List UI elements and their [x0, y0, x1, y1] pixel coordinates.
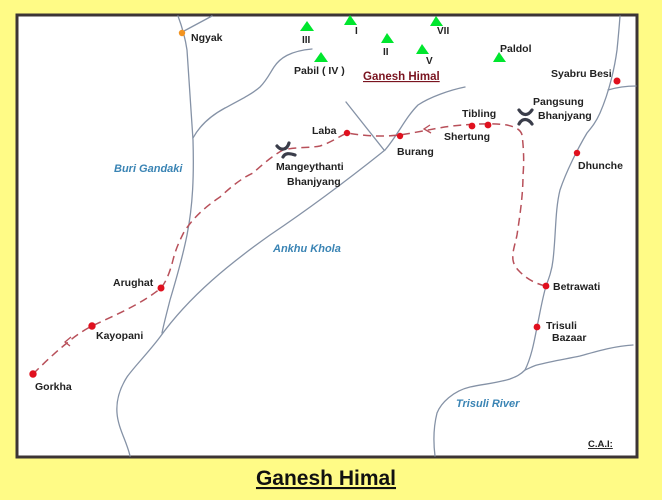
trek route	[33, 124, 546, 374]
arrow: route direction near Shertung	[424, 125, 431, 133]
rivers	[117, 16, 636, 456]
town labels: Shertung	[444, 131, 490, 143]
town markers	[29, 78, 621, 378]
town labels: Mangeythanti	[276, 161, 344, 173]
town labels: Pangsung	[533, 96, 584, 108]
town labels: Syabru Besi	[551, 68, 612, 80]
peaks	[300, 15, 506, 62]
town labels: Burang	[397, 146, 434, 158]
town labels: Tibling	[462, 108, 496, 120]
town labels: Kayopani	[96, 330, 143, 342]
river labels	[114, 163, 520, 410]
peak labels: V	[426, 56, 433, 67]
title: Ganesh Himal	[256, 467, 396, 490]
marker: Ngyak	[179, 30, 185, 36]
town labels: Arughat	[113, 277, 154, 289]
peak labels: Pabil ( IV )	[294, 65, 345, 77]
town labels: Trisuli	[546, 320, 577, 332]
town labels: Laba	[312, 125, 337, 137]
town labels: Gorkha	[35, 381, 72, 393]
peak labels: Paldol	[500, 43, 532, 55]
peak labels: II	[383, 47, 389, 58]
town labels: Dhunche	[578, 160, 623, 172]
river labels: Trisuli River	[456, 398, 520, 410]
credit: C.A.I:	[588, 439, 613, 450]
heading: Ganesh Himal map label: Ganesh Himal	[363, 71, 440, 83]
peak labels: VII	[437, 26, 449, 37]
peak labels	[294, 26, 532, 77]
arrow: route direction near Kayopani	[65, 337, 71, 346]
town labels: Ngyak	[191, 32, 223, 44]
river labels: Ankhu Khola	[272, 243, 341, 255]
peak labels: I	[355, 26, 358, 37]
river labels: Buri Gandaki	[114, 163, 183, 175]
town labels: Bhanjyang	[287, 176, 341, 188]
town labels: Bhanjyang	[538, 110, 592, 122]
pass: Pangsung Bhanjyang	[519, 110, 532, 124]
town labels: Bazaar	[552, 332, 586, 344]
pass: Mangeythanti Bhanjyang	[277, 143, 295, 157]
town labels: Betrawati	[553, 281, 600, 293]
town labels	[35, 32, 623, 393]
peak labels: III	[302, 35, 311, 46]
